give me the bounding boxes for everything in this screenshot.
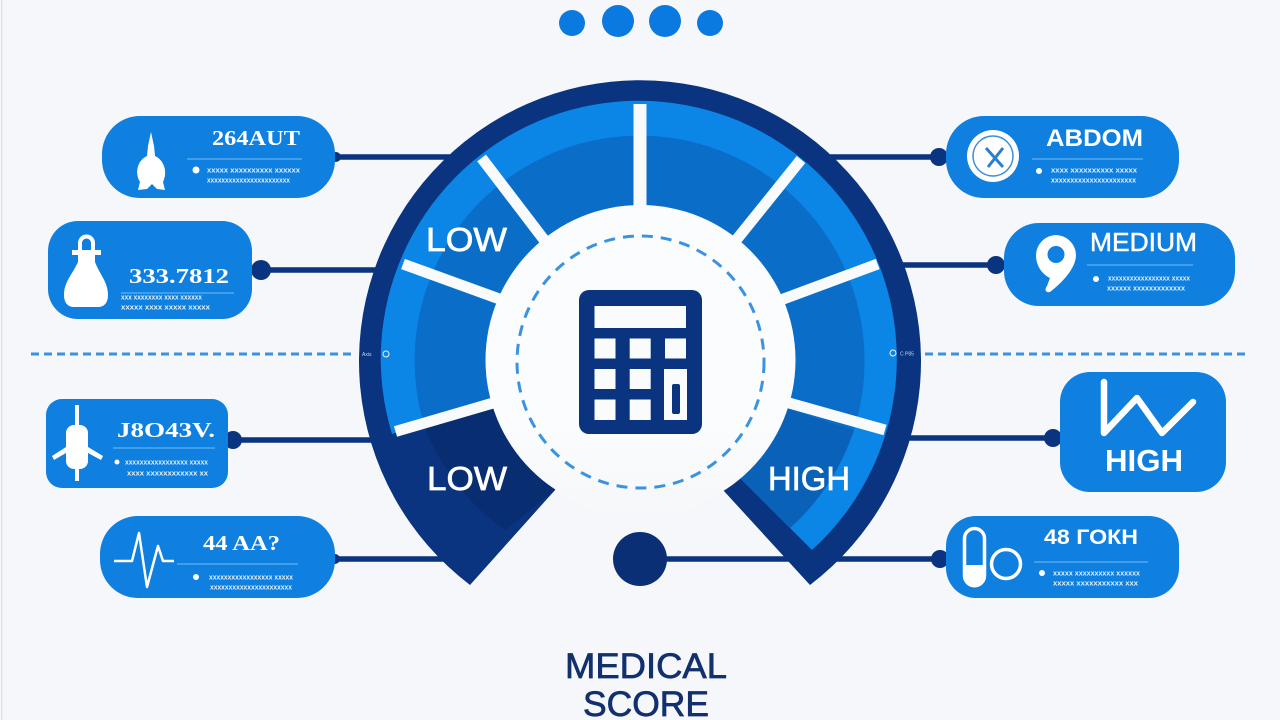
card: left 4: xxxxxxxxxxxxxxxxx xxxxx (209, 574, 293, 582)
gauge (359, 80, 921, 586)
label: lower LOW: LOW (427, 460, 508, 497)
label: HIGH: HIGH (768, 460, 850, 497)
card: left 3 (46, 399, 228, 488)
icon: map pin (1036, 235, 1076, 292)
icon: round seal (967, 130, 1019, 182)
icon: calculator (579, 290, 702, 434)
card: left 2: xxx xxxxxxxx xxxx xxxxxx (121, 294, 202, 302)
icon: heartbeat (114, 533, 174, 587)
card: right 3 (1060, 372, 1226, 492)
low segment dark core (424, 362, 640, 530)
small marker right: C P85 (900, 352, 914, 358)
card: right 1 (946, 116, 1179, 198)
card: right 2 (1004, 223, 1235, 306)
card: left 1: 264AUT (212, 126, 300, 150)
dashed inner circle (517, 236, 764, 488)
card: left 2: xxxxx xxxx xxxxx xxxxx (121, 304, 210, 312)
connector end dots (224, 148, 1062, 568)
low segment navy (392, 362, 640, 558)
gauge center white disc (486, 205, 796, 515)
card: left 1: xxxxxxxxxxxxxxxxxxxxxxx (207, 178, 290, 184)
card: left 4 (100, 516, 335, 598)
card: left 1 (102, 116, 335, 198)
card: left 3: xxxxxxxxxxxxxxxxx xxxxx (125, 460, 208, 466)
card: right 4: 48 ГОКН (1044, 526, 1138, 549)
card: right 2: MEDIUM (1090, 227, 1197, 257)
icon: capsule and ring (963, 528, 1020, 588)
card: right 4 (946, 516, 1179, 598)
card: left 2: 333.7812 (129, 264, 229, 288)
card: right 4: xxxxx xxxxxxxxxx xxxxxx (1053, 570, 1140, 578)
card: left 3: J8O43V. (117, 418, 215, 442)
icon: flask (64, 234, 108, 307)
card: left 4: xxxxxxxxxxxxxxxxxxxxxx (210, 584, 292, 592)
icon: syringe (52, 405, 103, 481)
gauge darker inner band (415, 136, 865, 528)
icon: line chart (1104, 382, 1193, 433)
top pagination dots (559, 5, 723, 37)
card: right 1: xxxx xxxxxxxxxx xxxxx (1051, 168, 1137, 174)
small marker right (890, 350, 914, 358)
card: right 2: xxxxxx xxxxxxxxxxxxx (1107, 286, 1185, 292)
small marker left (362, 351, 389, 358)
card: right 1: xxxxxxxxxxxxxxxxxxxxxx (1051, 178, 1136, 184)
horizontal dashed divider (31, 352, 1247, 356)
card: right 3: HIGH (1105, 443, 1183, 478)
icon: bell shape (137, 132, 165, 190)
card: left 2 (48, 221, 252, 319)
high segment dark core (640, 362, 854, 528)
gauge white spokes (396, 104, 885, 432)
gauge bottom notch (555, 400, 723, 540)
bottom pointer dot (613, 532, 667, 586)
small marker left: Axis (362, 352, 372, 358)
connector lines (234, 157, 1053, 559)
label: upper LOW: LOW (426, 221, 508, 258)
title: MEDICAL (565, 647, 727, 686)
card: right 1: ABDOM (1046, 125, 1143, 152)
card: left 1: xxxxx xxxxxxxxxx xxxxxx (207, 168, 300, 174)
gauge outer navy ring (359, 80, 921, 585)
gauge light blue band (381, 101, 897, 550)
card: right 4: xxxxx xxxxxxxxxxx xxx (1053, 580, 1138, 588)
card: right 2: xxxxxxxxxxxxxxxxx xxxxx (1108, 276, 1190, 282)
card: left 3: xxxx xxxxxxxxxxxx xx (127, 470, 208, 478)
title (565, 647, 727, 720)
card: left 4: 44 AA? (203, 531, 280, 555)
